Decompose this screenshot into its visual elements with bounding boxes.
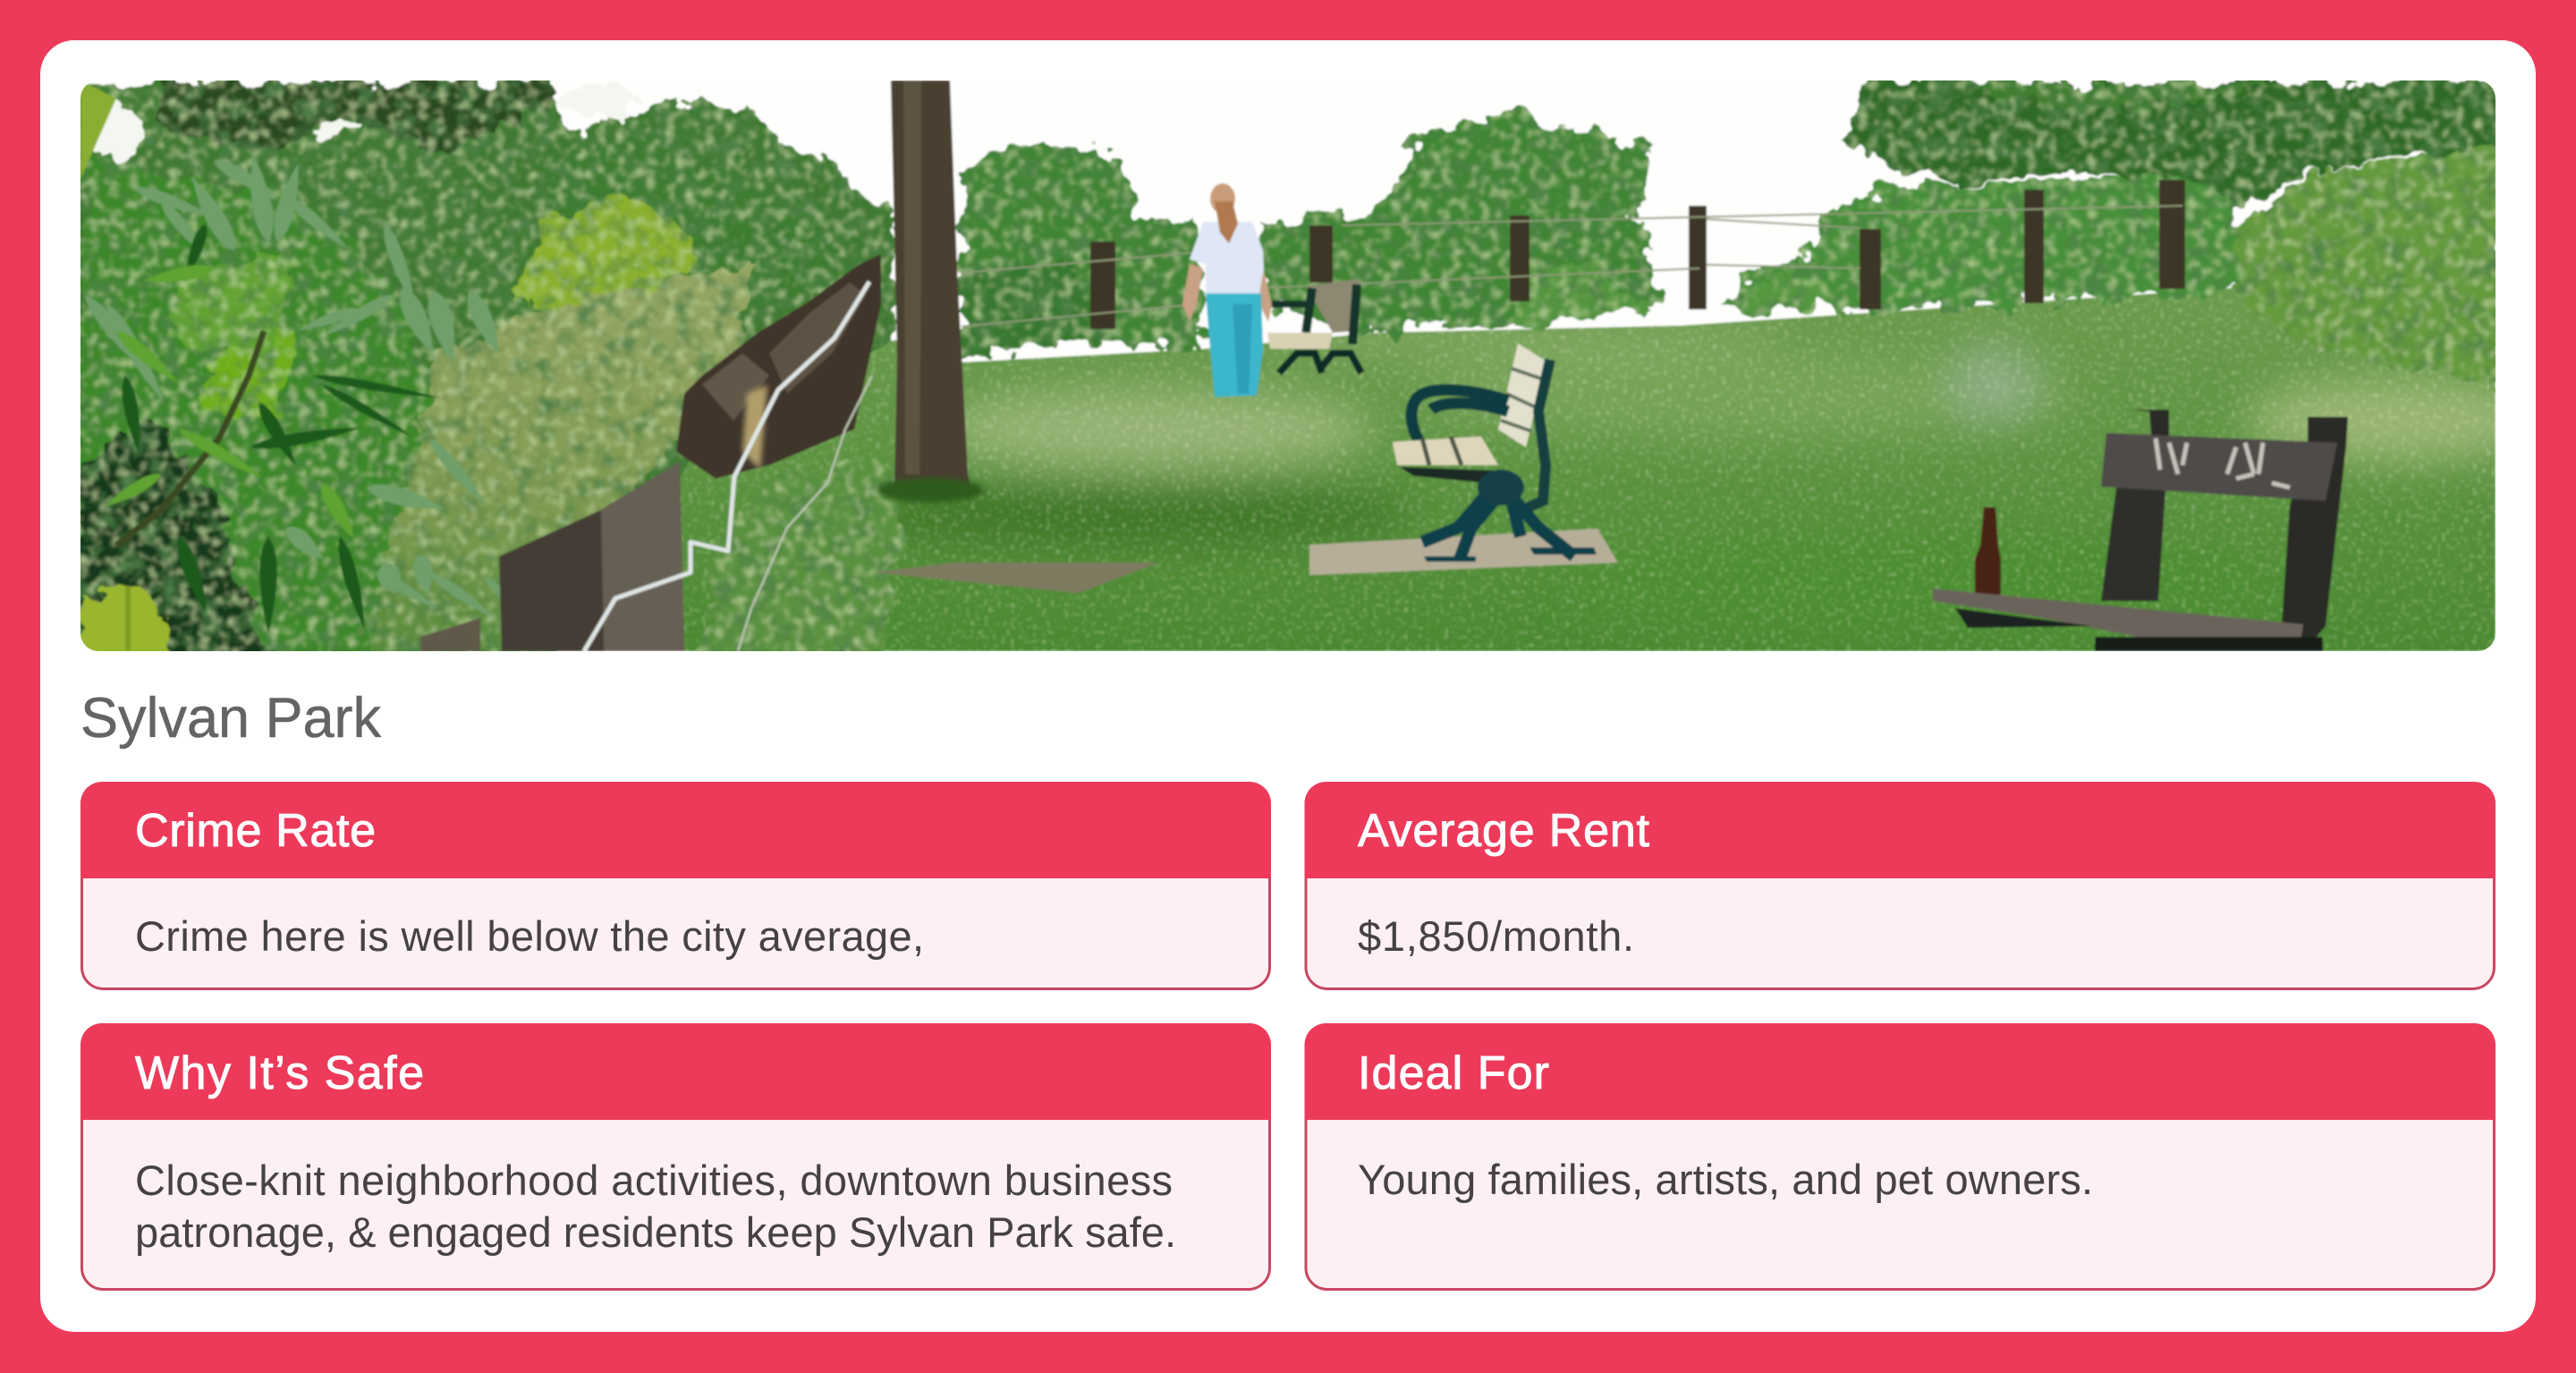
right tree canopy: [1843, 81, 2504, 206]
card body: [82, 784, 1270, 989]
pale fronds: [79, 153, 547, 632]
graffiti: [2156, 438, 2290, 487]
frame: [1512, 360, 1550, 514]
clover speckle: [680, 293, 2496, 651]
card title: Ideal For: [1358, 1047, 1549, 1099]
card: Why It's Safe: [80, 1023, 1271, 1290]
heading: Sylvan Park: [80, 687, 381, 750]
legs: [1422, 479, 1574, 559]
card title: Why It’s Safe: [135, 1047, 424, 1099]
card text: Young families, artists, and pet owners.: [1358, 1156, 2093, 1203]
wooden pole: [877, 81, 984, 503]
far bench: [1266, 279, 1361, 373]
card text: Close-knit neighborhood activities, downtown business: [135, 1157, 1173, 1204]
card header: [80, 782, 1271, 878]
card header: [1304, 1023, 2496, 1120]
sky: [86, 81, 2496, 364]
white rope: [584, 282, 869, 651]
backrest slats: [1498, 343, 1546, 447]
right hedge: [1722, 174, 2236, 309]
tall meadow grass: [358, 259, 751, 662]
second rope: [738, 376, 872, 651]
grass lawn: [680, 286, 2496, 651]
armrest: [1411, 390, 1508, 451]
card header: [80, 1023, 1271, 1120]
ground slab: [874, 563, 1158, 593]
left tree canopy: [54, 81, 894, 680]
card text: [135, 1157, 1176, 1256]
centre bushes: [962, 116, 1664, 358]
clover patches: [898, 324, 2496, 589]
distant fence posts and wires: [962, 180, 2185, 329]
card text: $1,850/month.: [1358, 912, 1634, 960]
sky gaps in canopy: [93, 84, 640, 165]
right hillside: [2227, 125, 2504, 385]
card text: Crime here is well below the city average,: [135, 912, 924, 960]
card body: [1306, 784, 2494, 989]
brown bottle: [1975, 507, 2001, 595]
photo: Sylvan Park: [54, 81, 2549, 680]
seat: [1393, 436, 1498, 465]
near bench slab: [1309, 529, 1618, 575]
card text: patronage, & engaged residents keep Sylvan Park safe.: [135, 1208, 1176, 1256]
card title: Average Rent: [1358, 805, 1650, 857]
card: Average Rent: [1304, 782, 2496, 989]
woman walking: [1182, 183, 1272, 397]
card header: [1304, 782, 2496, 878]
card body: [1306, 1025, 2494, 1290]
right bench: [1933, 410, 2348, 651]
card: Ideal For: [1304, 1023, 2496, 1290]
wooden rail fence: [420, 254, 881, 651]
card: Crime Rate: [80, 782, 1271, 989]
graffitied backrest: [2101, 433, 2337, 501]
dark fronds: [118, 222, 441, 633]
fern lower left: [80, 588, 179, 662]
bench posts: [2129, 410, 2169, 435]
yellow flowering shrub: [510, 190, 698, 313]
bright leaves: [102, 261, 361, 543]
card body: [82, 1025, 1270, 1290]
near green bench: [1393, 343, 1597, 562]
bench seat: [1933, 589, 2303, 640]
card title: Crime Rate: [135, 805, 376, 857]
left foliage: [79, 81, 547, 662]
low grass by fence: [707, 447, 903, 662]
